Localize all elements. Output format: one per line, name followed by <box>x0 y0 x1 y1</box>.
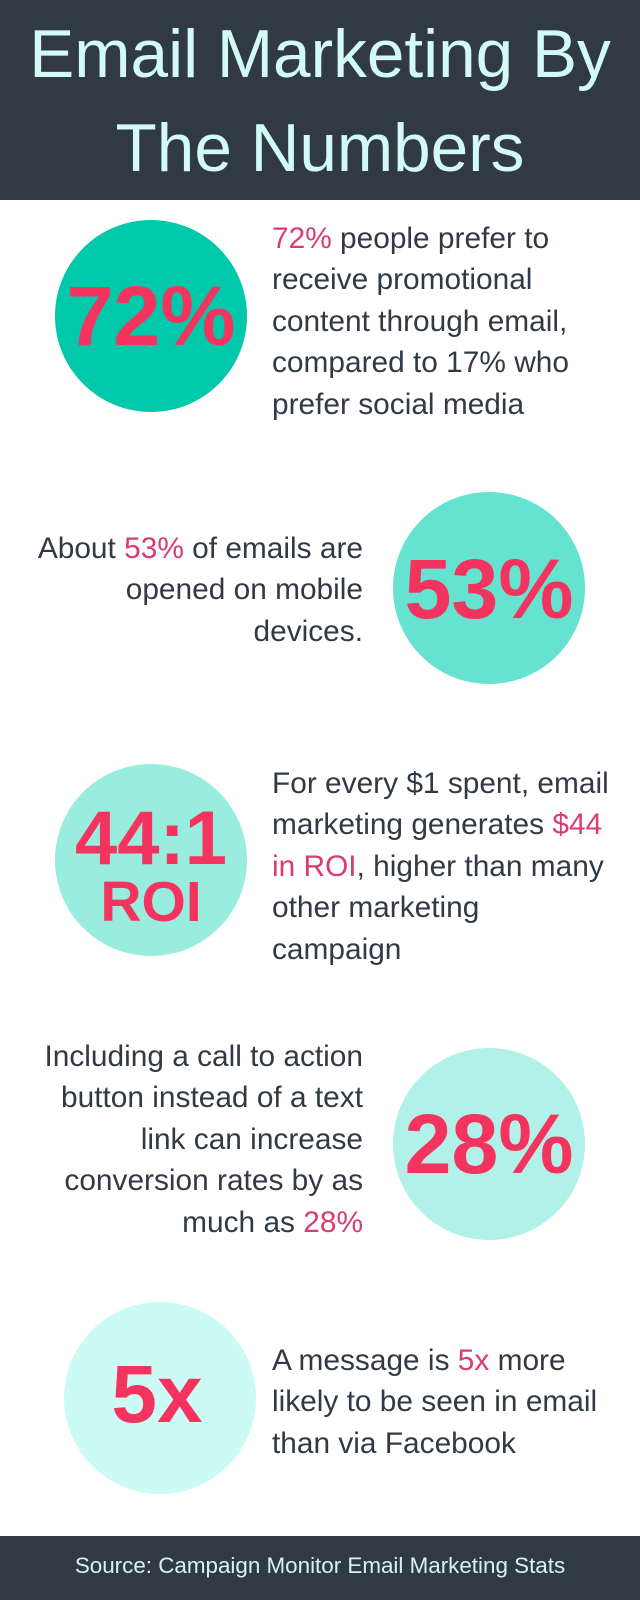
text: 28% description: Including a call to action <box>44 1040 363 1073</box>
text: 28% description: link can increase <box>141 1123 363 1156</box>
header banner with title <box>0 0 640 200</box>
panel: 44:1 ROI stat <box>55 764 609 966</box>
number: 44:1: 44:1 <box>75 796 227 881</box>
panel: 53% stat <box>38 492 585 684</box>
text: ROI description: For every $1 spent, email <box>272 767 609 800</box>
source text: Source: Campaign Monitor Email Marketing Stats <box>75 1553 565 1578</box>
text: ROI description: marketing generates $44 <box>272 808 602 841</box>
text: ROI description: other marketing <box>272 891 479 924</box>
text: 53% description <box>38 532 363 648</box>
number: 28%: 28% <box>404 1097 574 1191</box>
text: 5x description <box>272 1344 597 1460</box>
text: 5x description: than via Facebook <box>272 1427 516 1460</box>
number: 5x: 5x <box>111 1349 203 1440</box>
title: Email Marketing By <box>29 17 611 92</box>
text: 72% description: 72% people prefer to <box>272 222 549 255</box>
text: 72% description: compared to 17% who <box>272 346 569 379</box>
text: 28% description: conversion rates by as <box>64 1164 363 1197</box>
text: 53% description: About 53% of emails are <box>38 532 363 565</box>
panel: 5x stat <box>64 1302 597 1494</box>
circle: 44:1 ROI <box>55 764 247 956</box>
label: ROI: ROI <box>100 870 202 934</box>
text: 5x description: likely to be seen in email <box>272 1385 597 1418</box>
text: 72% description <box>272 222 569 421</box>
text: ROI description: in ROI, higher than many <box>272 850 604 883</box>
number: 72%: 72% <box>66 269 236 363</box>
title: The Numbers <box>116 110 524 186</box>
text: 28% description: button instead of a text <box>61 1081 363 1114</box>
text: ROI description: campaign <box>272 933 401 966</box>
circle: 28% <box>393 1048 585 1240</box>
text: 72% description: receive promotional <box>272 263 532 296</box>
number: 44:1 ROI <box>75 796 227 934</box>
text: ROI description <box>272 767 609 966</box>
number: 53%: 53% <box>404 542 574 636</box>
text: 5x description: A message is 5x more <box>272 1344 566 1377</box>
text: 72% description: content through email, <box>272 305 567 338</box>
text: 53% description: opened on mobile <box>126 573 363 606</box>
text: 28% description <box>44 1040 363 1239</box>
footer banner <box>0 1536 640 1600</box>
panel: 72% stat <box>55 220 569 421</box>
text: 53% description: devices. <box>254 615 363 648</box>
circle: 72% <box>55 220 247 412</box>
title <box>29 17 611 186</box>
panel: 28% stat <box>44 1040 585 1240</box>
circle: 53% <box>393 492 585 684</box>
text: 72% description: prefer social media <box>272 388 524 421</box>
circle: 5x <box>64 1302 256 1494</box>
text: 28% description: much as 28% <box>182 1206 363 1239</box>
